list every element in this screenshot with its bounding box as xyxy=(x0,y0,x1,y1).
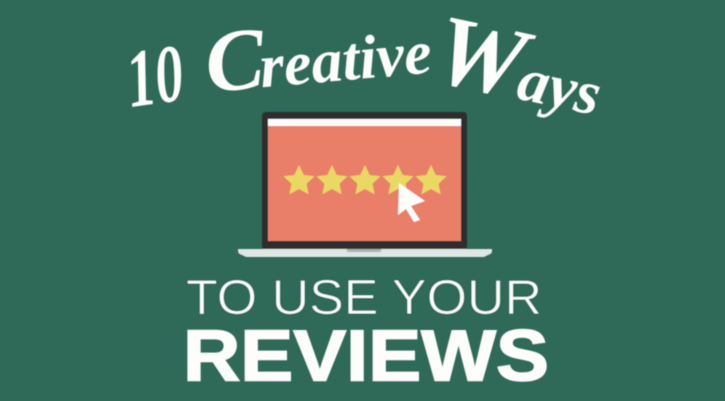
title word: Creative: Creative xyxy=(201,0,435,112)
laptop base xyxy=(238,249,492,257)
star 5 xyxy=(416,165,446,194)
star 1 xyxy=(284,165,314,194)
title: script heading xyxy=(121,0,614,137)
star 3 xyxy=(350,165,380,194)
subtitle: reviews: REVIEWS xyxy=(183,316,549,396)
star 2 xyxy=(316,165,348,194)
icon: laptop with star rating xyxy=(238,112,492,257)
five stars xyxy=(284,165,446,194)
title word: 10: 10 xyxy=(121,27,189,125)
laptop screen xyxy=(268,126,461,241)
star 4 xyxy=(382,165,414,194)
laptop body xyxy=(262,112,467,250)
subtitle: to use your: TO USE YOUR xyxy=(186,271,542,325)
laptop notch xyxy=(347,249,381,252)
browser bar xyxy=(268,119,461,126)
icon: mouse cursor xyxy=(398,183,425,222)
